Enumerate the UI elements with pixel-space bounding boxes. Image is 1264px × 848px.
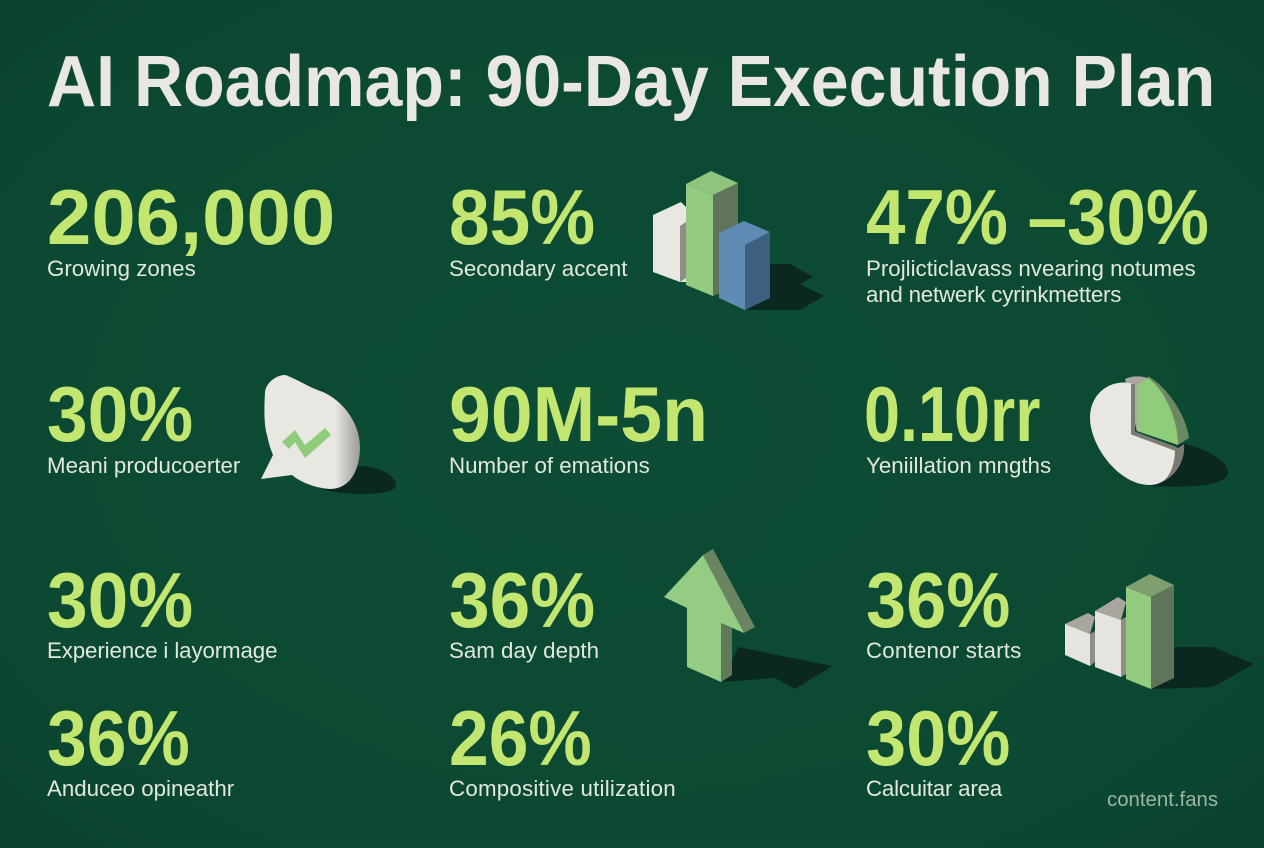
stat: 85%: Secondary accent <box>449 256 627 281</box>
stat: 30% experience <box>47 556 277 663</box>
stat: 36% opinion: Anduceo opineathr <box>47 776 234 801</box>
stat: 206,000: 206,000 <box>47 173 335 261</box>
stat: 47% -30%: 47% –30% <box>866 173 1209 261</box>
stat: 30% producer <box>47 370 240 478</box>
stat: 26% utilization <box>449 694 676 801</box>
stat: 0.10: 0.10rr <box>864 370 1040 458</box>
stat: 26% utilization: 26% <box>449 694 592 782</box>
stat: 36% opinion <box>47 694 234 801</box>
stat: 47% -30% <box>866 173 1209 307</box>
icon: up arrow <box>664 549 832 689</box>
stat: 85% <box>449 173 628 281</box>
stat: 30% area: Calcuitar area <box>866 776 1002 801</box>
stat: 36% depth: Sam day depth <box>449 638 599 663</box>
credit: content.fans <box>1107 789 1218 811</box>
icon: 3D bar chart <box>653 171 824 310</box>
stat: 36% depth: 36% <box>449 556 595 644</box>
icon: rising bars <box>1065 574 1254 689</box>
stat: 26% utilization: Compositive utilization <box>449 776 676 801</box>
stat: 47% -30%: Projlicticlavass nvearing notumes <box>866 256 1196 281</box>
title: AI Roadmap: 90-Day Execution Plan <box>47 42 1215 122</box>
stat: 30% experience: Experience i layormage <box>47 638 277 663</box>
stat: 36% starts: 36% <box>866 556 1010 644</box>
stat: 30% producer: Meani producoerter <box>47 453 240 478</box>
icon: speech bubble <box>261 375 396 494</box>
stat: 30% area: 30% <box>866 694 1010 782</box>
icon: pie chart <box>1090 376 1228 487</box>
stat: 30% experience: 30% <box>47 556 193 644</box>
stat: 85%: 85% <box>449 173 595 261</box>
stat: 206,000: Growing zones <box>47 256 196 281</box>
stat: 30% producer: 30% <box>47 370 193 458</box>
stat: 0.10: Yeniillation mngths <box>866 453 1051 478</box>
stat: 47% -30%: and netwerk cyrinkmetters <box>866 282 1121 307</box>
stat: 36% opinion: 36% <box>47 694 190 782</box>
stat: 90M-5n: Number of emations <box>449 453 650 478</box>
stat: 90M-5n: 90M-5n <box>449 370 708 458</box>
stat: 36% starts: Contenor starts <box>866 638 1021 663</box>
